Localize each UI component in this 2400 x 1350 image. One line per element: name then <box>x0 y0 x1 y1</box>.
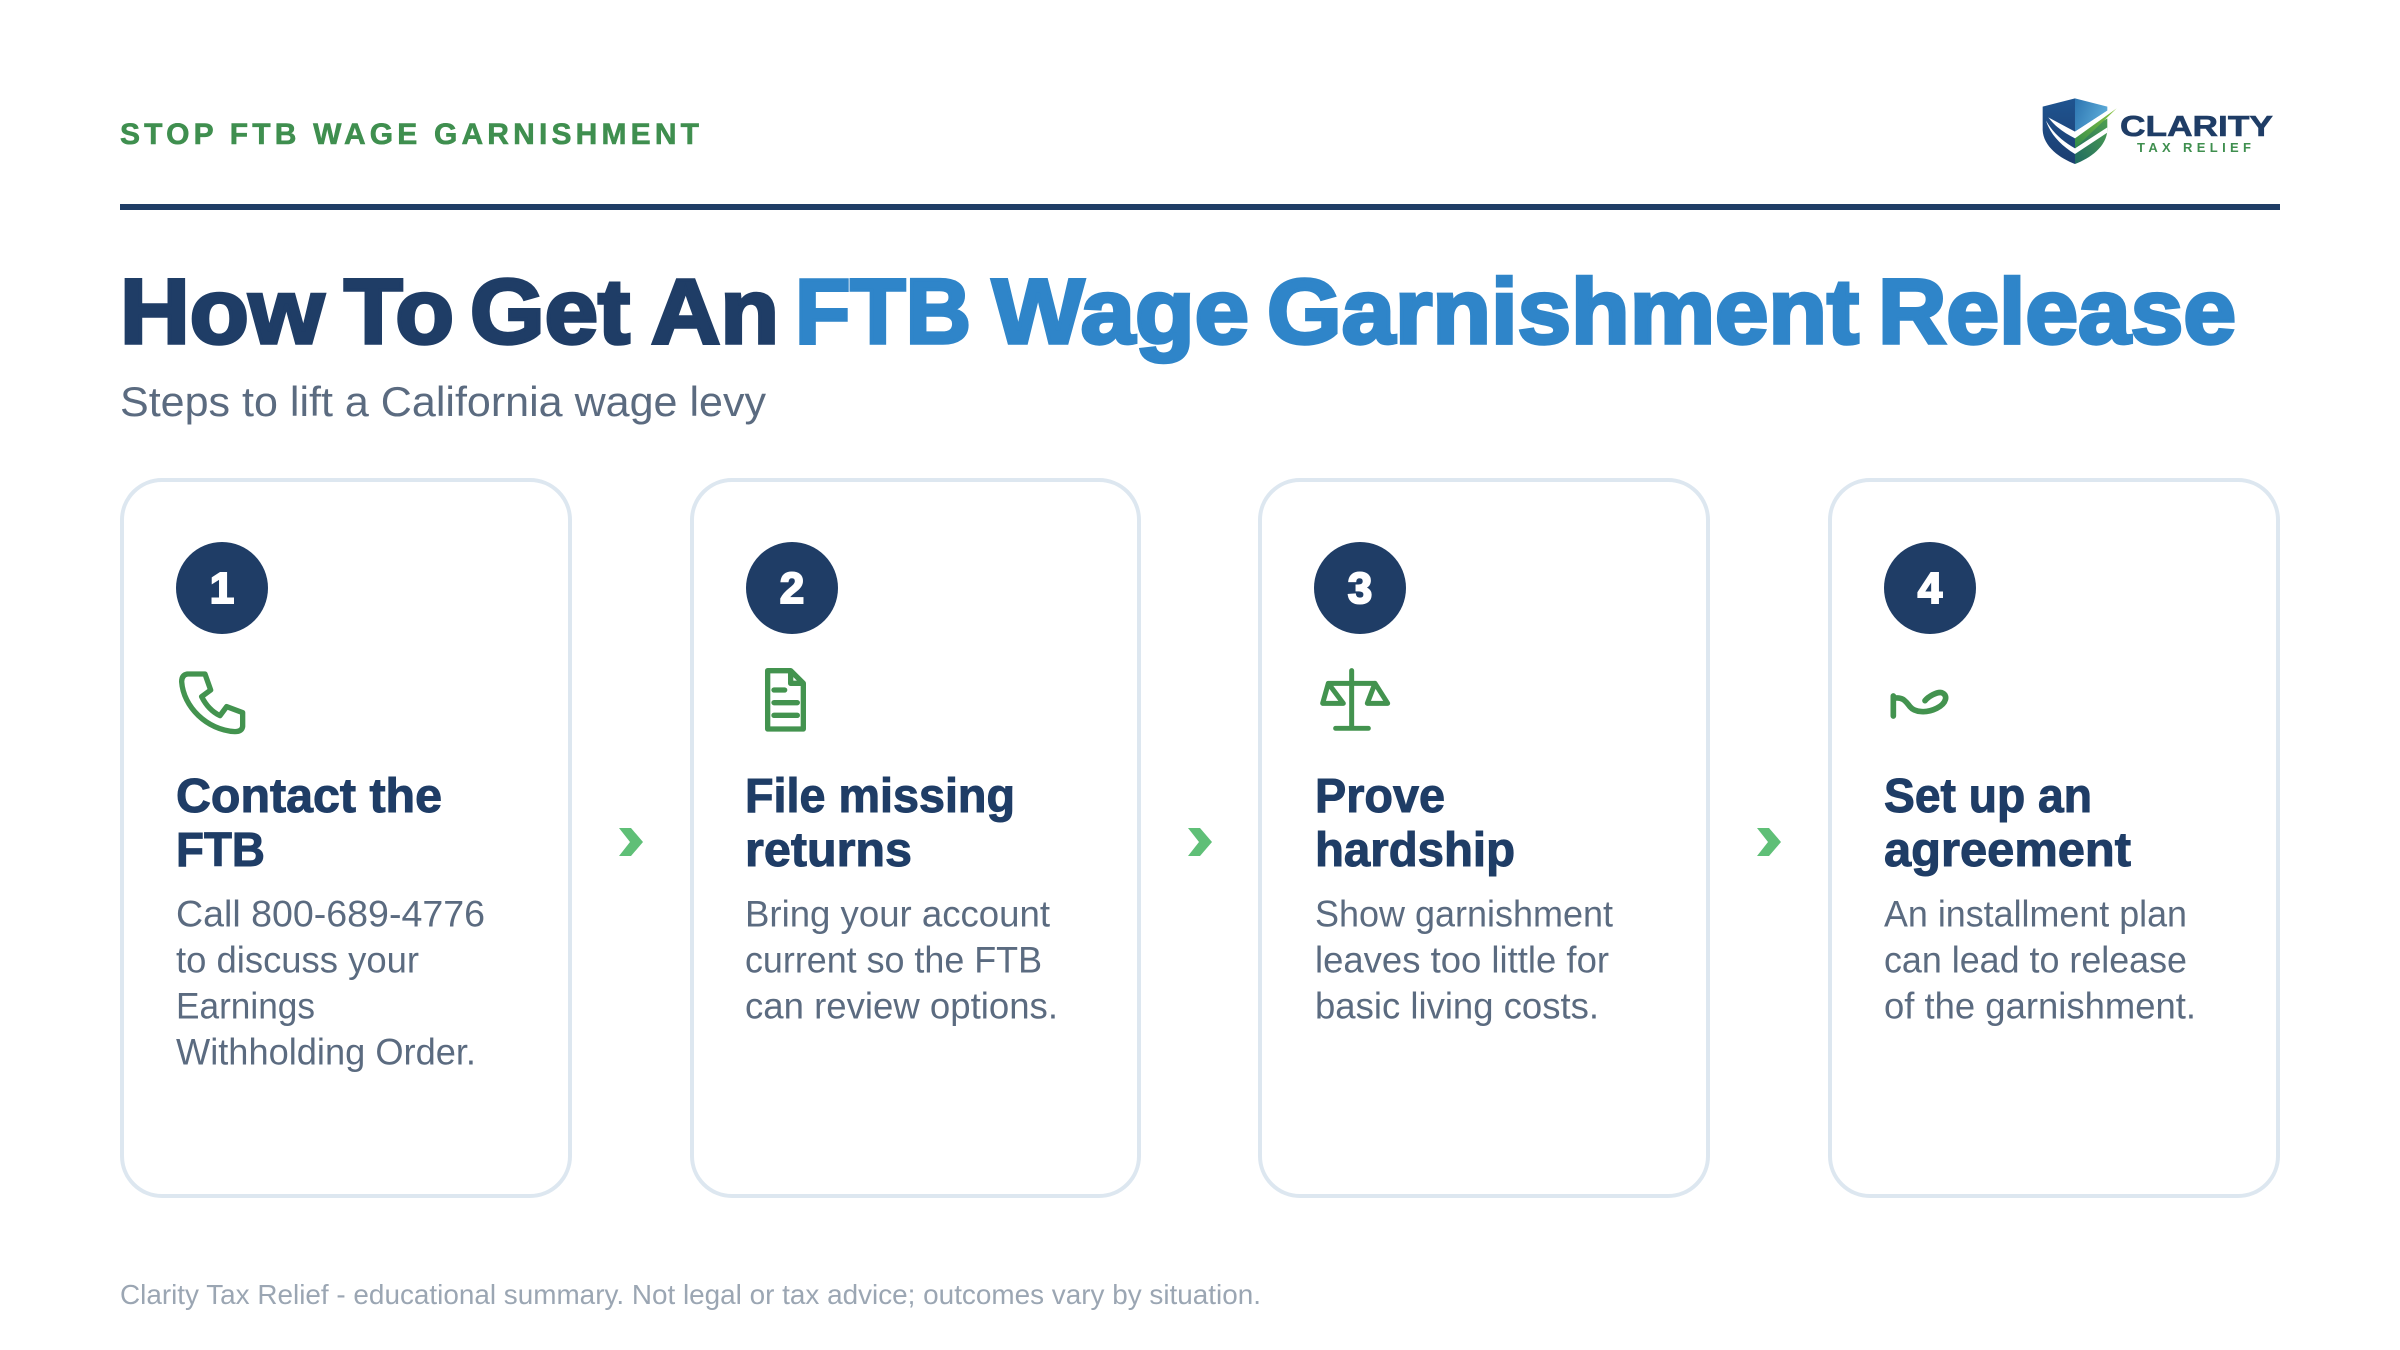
title <box>120 261 2236 363</box>
body text: step 3: basic living costs. <box>1315 984 1599 1026</box>
body text: step 1 <box>176 892 485 1072</box>
body text: step 1: Earnings <box>176 984 315 1026</box>
title: FTB <box>795 261 971 363</box>
body text: step 4 <box>1884 892 2196 1026</box>
body text: step 1: Withholding Order. <box>176 1030 476 1072</box>
heading: contact the FTB: Contact the <box>176 770 442 823</box>
body text: step 4: An installment plan <box>1884 892 2187 934</box>
header rule <box>120 204 2280 210</box>
panel: step 2 card <box>692 480 1139 1196</box>
logo: Clarity Tax Relief <box>2043 98 2273 164</box>
heading: contact the FTB: FTB <box>176 824 265 877</box>
heading: set up an agreement: Set up an <box>1884 770 2092 823</box>
body text: step 2: current so the FTB <box>745 938 1042 980</box>
icon: handshake <box>1893 693 1946 716</box>
arrow 3 <box>1757 828 1781 856</box>
heading: file missing returns: returns <box>745 824 912 877</box>
body text: step 4: can lead to release <box>1884 938 2187 980</box>
step number 1: 1 <box>210 564 234 613</box>
step number 2: 2 <box>780 564 804 613</box>
step number 2 <box>746 542 838 634</box>
body text: step 3: leaves too little for <box>1315 938 1609 980</box>
heading: prove hardship <box>1315 770 1515 877</box>
heading: file missing returns: File missing <box>745 770 1015 823</box>
body text: step 1: to discuss your <box>176 938 419 980</box>
title: How <box>120 261 324 363</box>
arrow 2 <box>1188 828 1212 856</box>
panel: step 4 card <box>1830 480 2278 1196</box>
panel: step 1 card <box>122 480 570 1196</box>
body text: step 3: Show garnishment <box>1315 892 1614 934</box>
step number 3: 3 <box>1348 564 1372 613</box>
body text: step 4: of the garnishment. <box>1884 984 2196 1026</box>
body text: step 1: Call 800-689-4776 <box>176 892 485 934</box>
step number 4 <box>1884 542 1976 634</box>
panel: step 3 card <box>1260 480 1708 1196</box>
body text: step 2: Bring your account <box>745 892 1051 934</box>
heading: set up an agreement: agreement <box>1884 824 2131 877</box>
body text: step 2: can review options. <box>745 984 1058 1026</box>
title: Get <box>470 261 630 363</box>
step number 3 <box>1314 542 1406 634</box>
title: An <box>651 261 779 363</box>
title: Garnishment <box>1267 261 1859 363</box>
arrow 1 <box>619 828 643 856</box>
heading: prove hardship: hardship <box>1315 824 1515 877</box>
icon: phone <box>182 674 243 732</box>
heading: file missing returns <box>745 770 1015 877</box>
body text: step 3 <box>1315 892 1614 1026</box>
title: Wage <box>992 261 1249 363</box>
footer disclaimer: Clarity Tax Relief - educational summary. Not legal or tax advice; outcomes vary by situation. <box>120 1279 1261 1310</box>
subtitle: Steps to lift a California wage levy <box>120 378 766 425</box>
step number 4: 4 <box>1918 564 1943 613</box>
logo: Clarity Tax Relief: TAX RELIEF <box>2137 140 2251 155</box>
heading: set up an agreement <box>1884 770 2131 877</box>
step number 1 <box>176 542 268 634</box>
body text: step 2 <box>745 892 1058 1026</box>
icon: scales <box>1323 671 1388 728</box>
icon: document <box>768 671 803 729</box>
eyebrow label: STOP FTB WAGE GARNISHMENT <box>120 118 699 151</box>
heading: contact the FTB <box>176 770 442 877</box>
title: To <box>344 261 454 363</box>
heading: prove hardship: Prove <box>1315 770 1445 823</box>
title: Release <box>1878 261 2236 363</box>
logo: Clarity Tax Relief: CLARITY <box>2120 111 2273 143</box>
